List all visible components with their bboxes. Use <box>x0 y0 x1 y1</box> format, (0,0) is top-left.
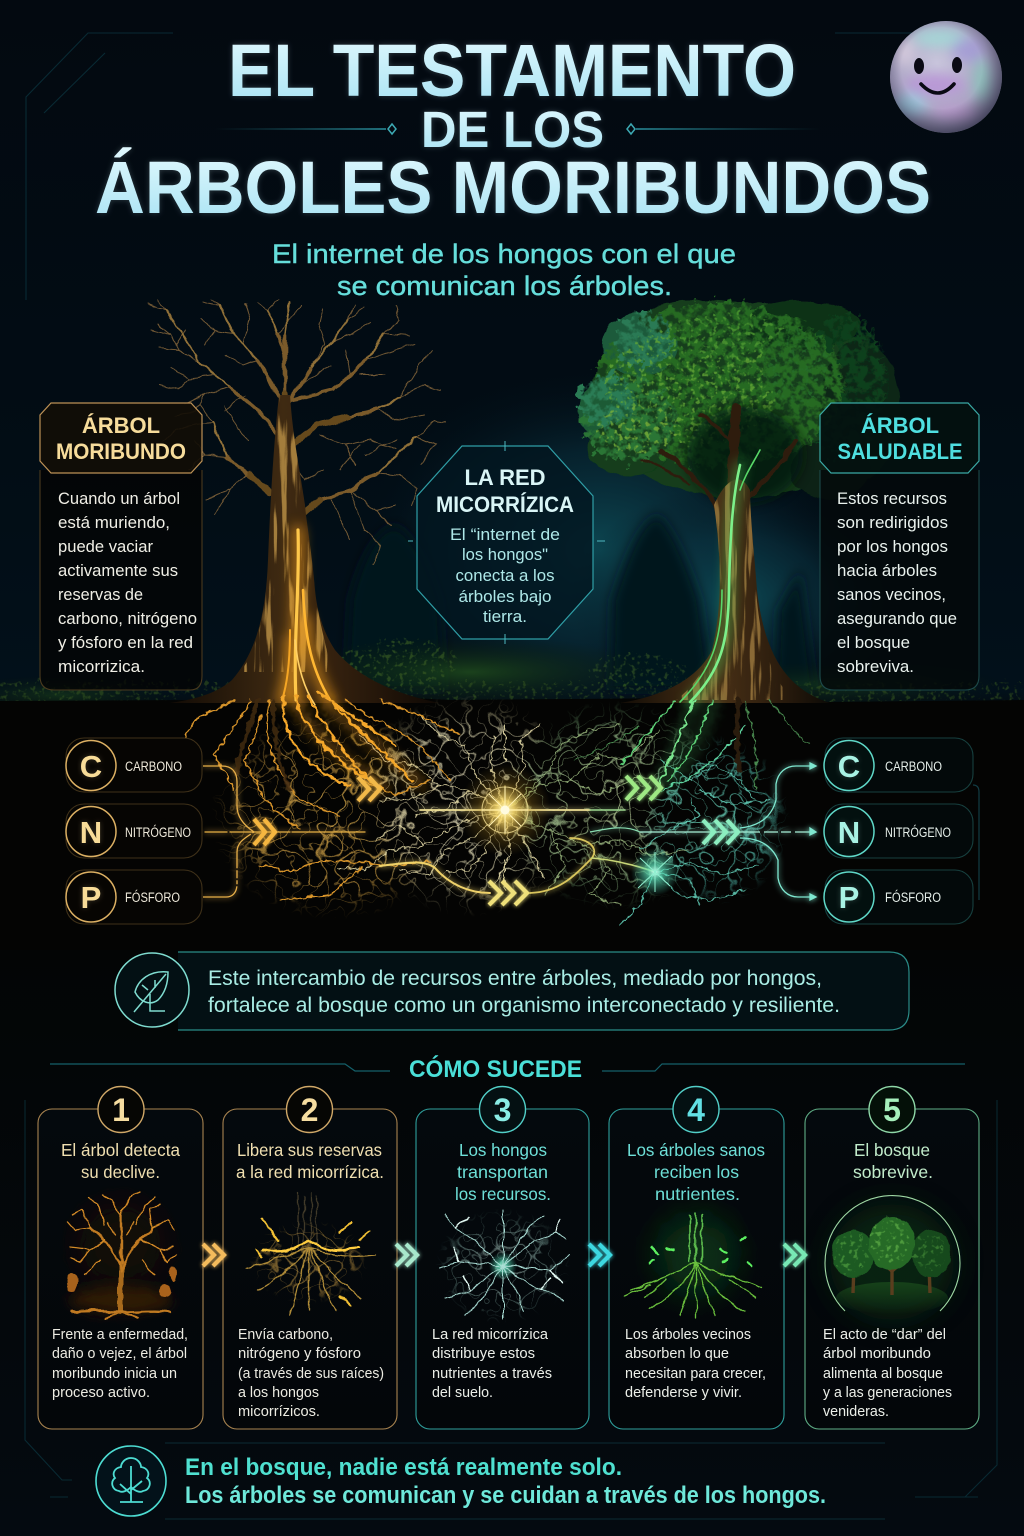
step number <box>480 1086 526 1132</box>
step text: alimenta al bosque <box>823 1366 943 1382</box>
title dividers <box>215 124 820 134</box>
step heading <box>455 1140 551 1204</box>
arrow 4 to 5 <box>784 1244 805 1266</box>
body text: está muriendo, <box>58 513 170 532</box>
body text: el bosque <box>837 633 910 652</box>
closing text: Los árboles se comunican y se cuidan a través de los hongos. <box>185 1482 826 1509</box>
description: árboles bajo <box>458 588 552 606</box>
glowing core <box>282 530 330 705</box>
arrow 2 to 3 <box>396 1244 417 1266</box>
body text: sanos vecinos, <box>837 585 946 604</box>
step heading: El árbol detecta <box>61 1140 180 1160</box>
step text: del suelo. <box>432 1385 493 1401</box>
step text: Frente a enfermedad, <box>52 1327 188 1343</box>
step 5 card <box>805 1086 979 1429</box>
step number <box>286 1086 332 1132</box>
closing text <box>185 1454 826 1509</box>
panel: healthy tree <box>820 403 979 690</box>
body text <box>837 489 957 676</box>
left nutrient pills: N <box>80 815 102 850</box>
step number: 3 <box>494 1092 511 1128</box>
description <box>450 526 560 626</box>
step text: La red micorrízica <box>432 1327 549 1343</box>
description: conecta a los <box>456 567 554 585</box>
arrow 3 to 4 <box>589 1244 610 1266</box>
step text: proceso activo. <box>52 1385 150 1401</box>
illustration: surviving forest <box>825 1196 960 1320</box>
subtitle: se comunican los árboles. <box>337 271 672 301</box>
closing text: En el bosque, nadie está realmente solo. <box>185 1454 622 1481</box>
dying tree trunk <box>170 395 440 703</box>
body text: son redirigidos <box>837 513 948 532</box>
bark streaks <box>676 479 795 700</box>
chevrons: gold N <box>254 819 275 845</box>
body text: sobreviva. <box>837 657 914 676</box>
heading text: ÁRBOL <box>861 413 939 438</box>
heading text <box>838 413 962 464</box>
heading text <box>56 413 186 464</box>
body text: reservas de <box>58 585 143 604</box>
crown <box>578 300 900 503</box>
body text: micorrizica. <box>58 657 145 676</box>
step heading <box>236 1140 384 1182</box>
left nutrient pills: P <box>81 880 101 915</box>
step 4 card <box>609 1086 784 1429</box>
step text: micorrízicos. <box>238 1404 320 1420</box>
right nutrient pills: FÓSFORO <box>885 890 941 905</box>
arrow 1 to 2 <box>203 1244 224 1266</box>
title: ÁRBOLES MORIBUNDOS <box>95 146 931 229</box>
dying tree <box>148 300 445 705</box>
body text: hacia árboles <box>837 561 937 580</box>
distant forest <box>345 515 815 690</box>
iridescent smiley orb <box>890 21 1002 133</box>
step heading <box>627 1140 765 1204</box>
connectors left <box>203 766 254 897</box>
title <box>95 29 931 229</box>
icon: leaf <box>115 953 189 1027</box>
panel header <box>820 403 979 473</box>
glowing green core <box>680 450 760 702</box>
step heading: Libera sus reservas <box>237 1140 382 1160</box>
flow chevrons <box>254 776 738 905</box>
body text: Cuando un árbol <box>58 489 180 508</box>
step number: 1 <box>112 1092 130 1128</box>
step heading <box>61 1140 180 1182</box>
left nutrient pills: CARBONO <box>125 759 182 774</box>
right nutrient pills <box>824 738 979 924</box>
left nutrient pills: NITRÓGENO <box>125 825 191 840</box>
heading text: SALUDABLE <box>838 439 962 464</box>
step text: Envía carbono, <box>238 1327 333 1343</box>
step text <box>238 1327 384 1420</box>
step text: venideras. <box>823 1404 889 1420</box>
flow line N right <box>590 828 812 832</box>
step text: árbol moribundo <box>823 1346 931 1362</box>
octagon ticks <box>408 441 605 644</box>
step 3 card <box>416 1086 589 1429</box>
golden bottom curve <box>205 786 655 893</box>
body text: por los hongos <box>837 537 948 556</box>
step text: nitrógeno y fósforo <box>238 1346 361 1362</box>
right nutrient pills: N <box>838 815 860 850</box>
step text <box>432 1327 552 1401</box>
right nutrient pills: C <box>838 749 860 784</box>
description: los hongos" <box>462 546 548 564</box>
step text: daño o vejez, el árbol <box>52 1346 187 1362</box>
step heading: nutrientes. <box>655 1184 740 1204</box>
body text: puede vaciar <box>58 537 153 556</box>
heading text: MORIBUNDO <box>56 439 186 464</box>
step text: (a través de sus raíces) <box>238 1366 384 1382</box>
illustration: receiving roots <box>625 1212 762 1318</box>
heading text: ÁRBOL <box>82 413 160 438</box>
connectors right <box>740 763 816 900</box>
title: EL TESTAMENTO <box>228 29 796 112</box>
heading: MICORRÍZICA <box>436 492 574 517</box>
chevrons: teal <box>703 820 738 844</box>
step heading: Los árboles sanos <box>627 1140 765 1160</box>
section heading: how it happens: CÓMO SUCEDE <box>409 1055 582 1083</box>
step text <box>625 1327 766 1401</box>
callout: resource exchange <box>115 952 909 1030</box>
falling leaves <box>66 1267 177 1297</box>
body text <box>58 489 197 676</box>
teal mycelial star <box>631 848 679 896</box>
panel header <box>40 403 202 473</box>
illustration: releasing roots <box>245 1192 375 1315</box>
step number <box>98 1086 144 1132</box>
left nutrient pills: FÓSFORO <box>125 890 180 905</box>
subtitle <box>272 239 736 301</box>
step number: 5 <box>883 1092 901 1128</box>
panel body <box>40 470 202 690</box>
main gold roots <box>180 692 460 900</box>
section heading: how it happens <box>50 1055 965 1083</box>
left nutrient pills <box>66 738 202 924</box>
step number <box>673 1086 719 1132</box>
left nutrient pills: C <box>80 749 102 784</box>
step text: defenderse y vivir. <box>625 1385 742 1401</box>
bark streaks <box>240 395 332 672</box>
body text: Estos recursos <box>837 489 947 508</box>
subtitle: El internet de los hongos con el que <box>272 239 736 269</box>
ground grass <box>0 636 1024 950</box>
callout text: fortalece al bosque como un organismo interconectado y resiliente. <box>208 993 840 1017</box>
panel body <box>820 470 979 690</box>
faint network <box>340 715 770 925</box>
step 1 card <box>38 1086 203 1429</box>
healthy tree <box>578 300 900 703</box>
body text: y fósforo en la red <box>58 633 193 652</box>
step text: moribundo inicia un <box>52 1366 177 1382</box>
step text: nutrientes a través <box>432 1366 552 1382</box>
mycorrhizal root network <box>180 692 812 925</box>
closing message <box>96 1443 885 1519</box>
green roots <box>575 700 810 790</box>
heading: LA RED <box>464 465 546 490</box>
callout text <box>208 966 840 1017</box>
step text: absorben lo que <box>625 1346 729 1362</box>
healthy tree trunk <box>620 479 830 703</box>
step heading: El bosque <box>854 1140 930 1160</box>
heading <box>436 465 574 517</box>
illustration: mycelial star <box>435 1208 571 1324</box>
step heading: Los hongos <box>459 1140 547 1160</box>
step text: necesitan para crecer, <box>625 1366 766 1382</box>
step text: distribuye estos <box>432 1346 535 1362</box>
title: DE LOS <box>421 101 604 158</box>
callout text: Este intercambio de recursos entre árboles, mediado por hongos, <box>208 966 822 990</box>
step heading: transportan <box>457 1162 548 1182</box>
dense vein web <box>210 693 790 920</box>
dying tree twigs <box>148 300 445 565</box>
step arrows <box>203 1244 805 1266</box>
step heading: reciben los <box>654 1162 739 1182</box>
step text <box>823 1327 952 1420</box>
step heading: los recursos. <box>455 1184 551 1204</box>
panel: dying tree <box>40 403 202 690</box>
body text: carbono, nitrógeno <box>58 609 197 628</box>
icon: tree <box>96 1446 166 1516</box>
dying tree branches <box>167 302 417 512</box>
central mycelial star <box>459 764 551 856</box>
step text: a los hongos <box>238 1385 319 1401</box>
step number <box>869 1086 915 1132</box>
body text: activamente sus <box>58 561 178 580</box>
right nutrient pills: NITRÓGENO <box>885 825 951 840</box>
step heading: sobrevive. <box>853 1162 933 1182</box>
step number: 4 <box>687 1092 705 1128</box>
step heading: a la red micorrízica. <box>236 1162 384 1182</box>
body text: asegurando que <box>837 609 957 628</box>
panel: mycorrhizal network <box>408 441 605 644</box>
chevrons: gold C <box>358 777 380 801</box>
right nutrient pills: CARBONO <box>885 759 942 774</box>
crown shadow <box>687 407 803 503</box>
step heading: su declive. <box>81 1162 160 1182</box>
step text <box>52 1327 188 1401</box>
step text: y a las generaciones <box>823 1385 952 1401</box>
description: tierra. <box>483 608 527 626</box>
illustration: dying tree <box>68 1192 175 1318</box>
chevrons: green <box>626 776 661 800</box>
description: El “internet de <box>450 526 560 544</box>
octagon <box>417 446 593 639</box>
step text: El acto de “dar” del <box>823 1327 946 1343</box>
healthy tree limbs <box>640 410 795 515</box>
chevrons: yellow bottom <box>489 881 527 905</box>
step 2 card <box>223 1086 397 1429</box>
step text: Los árboles vecinos <box>625 1327 751 1343</box>
right nutrient pills: P <box>839 880 859 915</box>
step number: 2 <box>301 1092 318 1128</box>
step heading <box>853 1140 933 1182</box>
